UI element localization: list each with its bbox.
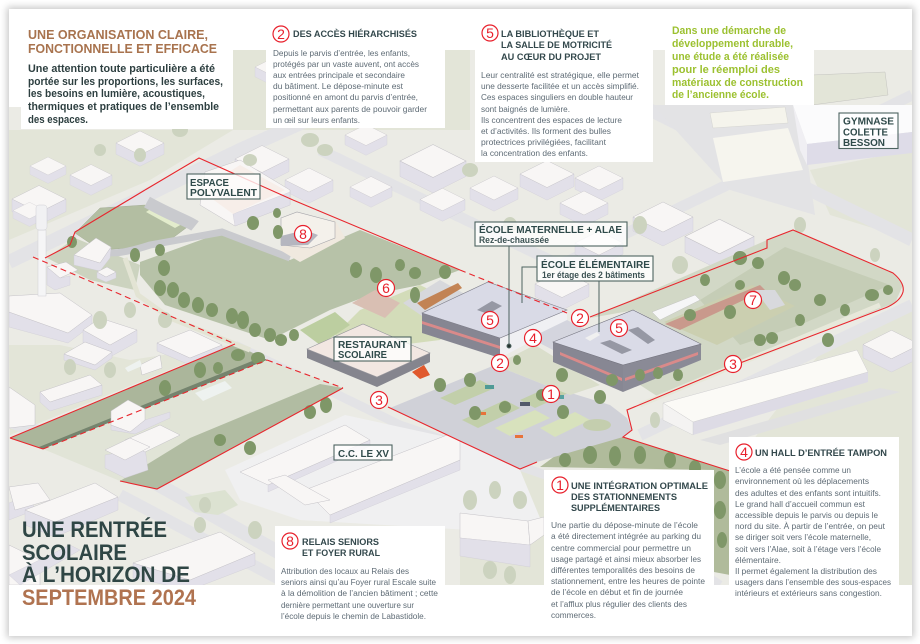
marker 8	[294, 226, 312, 242]
number badge 5	[482, 25, 498, 41]
marker 6: 6	[382, 280, 390, 296]
marker 1	[542, 386, 560, 402]
marker 3 west: 3	[375, 392, 383, 408]
body 5: une desserte facilitée et un accès simplifié.	[481, 81, 639, 91]
body 5: sont baignés de lumière.	[481, 104, 570, 114]
heading: organisation	[28, 28, 217, 56]
title: SCOLAIRE	[22, 540, 127, 565]
big shed south-east	[460, 350, 900, 575]
marker 7	[744, 292, 762, 308]
body 4	[735, 465, 891, 598]
label: école élémentaire: 1er étage des 2 bâtiments	[542, 270, 645, 280]
body 1: de l’école en début et fin de journée	[551, 587, 683, 597]
body 8: à la démolition de l’ancien bâtiment ; cette	[281, 588, 438, 598]
text: organisation intro: portée sur les proportions, les surfaces,	[28, 76, 223, 88]
body 1: a été directement intégrée au parking du	[551, 531, 701, 541]
lower-left buildings	[9, 483, 255, 590]
heading 5: LA BIBLIOTHÈQUE ET	[501, 28, 599, 39]
white panel: left edge	[9, 50, 21, 107]
panel: développement durable: Dans une démarche de	[672, 25, 786, 37]
number badge 4	[736, 444, 752, 460]
body 4: L’école a été pensée comme un	[735, 465, 851, 475]
panel: développement durable	[665, 25, 814, 105]
label: école élémentaire: ÉCOLE ÉLÉMENTAIRE	[541, 258, 650, 271]
number badge 1: 1	[556, 477, 564, 493]
body 4: environnement où les déplacements	[735, 476, 869, 486]
white panel: organisation	[21, 28, 233, 129]
school building left	[422, 282, 590, 358]
label: gymnase: COLETTE	[843, 128, 888, 138]
label: école maternelle: ÉCOLE MATERNELLE + ALAE	[479, 223, 622, 236]
body 2: un œil sur leurs enfants.	[273, 115, 360, 125]
marker 4	[524, 330, 542, 346]
title	[22, 517, 197, 610]
body 1	[551, 520, 705, 620]
trees	[67, 208, 893, 548]
body 8: seniors ainsi qu’au Foyer rural Escale suite	[281, 577, 436, 587]
marker 1: 1	[547, 386, 555, 402]
panel: développement durable: pour le réemploi des	[672, 64, 780, 76]
heading 1	[571, 480, 708, 513]
marker 2 south: 2	[496, 355, 504, 371]
title: SEPTEMBRE 2024	[22, 585, 197, 610]
body 4: intérieurs et extérieurs sans congestion.	[735, 588, 882, 598]
panel 1: stationnements	[544, 470, 714, 620]
espace polyvalent building	[200, 160, 290, 226]
number badge 1	[552, 477, 568, 493]
marker 6	[378, 280, 394, 296]
body 1: stationnement, entre les heures de pointe	[551, 576, 705, 586]
body 8: l’école depuis le chemin de Labastidole.	[281, 611, 426, 621]
marker 3 east: 3	[729, 356, 737, 372]
main school parking	[390, 345, 632, 469]
restaurant scolaire	[307, 324, 430, 387]
panel 8: relais seniors	[275, 526, 445, 621]
label: espace polyvalent: POLYVALENT	[190, 188, 258, 199]
heading 8: ET FOYER RURAL	[302, 547, 380, 558]
heading 5	[501, 28, 612, 62]
panel 2: accès hiérarchisés	[266, 26, 445, 128]
heading 1: SUPPLÉMENTAIRES	[571, 502, 660, 513]
body 1: et l’afflux plus régulier des clients des	[551, 599, 687, 609]
label: C.C. Le XV: C.C. LE XV	[338, 449, 389, 460]
label: restaurant scolaire	[334, 337, 411, 361]
body 2	[273, 48, 427, 125]
body 4: nord du site. À partir de l’entrée, on peut	[735, 521, 886, 531]
roads	[10, 128, 912, 479]
panel 4: hall d'entrée	[729, 437, 899, 598]
body 2: du bâtiment. Le dépose-minute est	[273, 81, 404, 91]
marker 3 east	[724, 356, 742, 372]
body 8: Attribution des locaux au Relais des	[281, 566, 409, 576]
panel: développement durable: une étude a été réalisée	[672, 51, 789, 63]
text: organisation intro: Une attention toute particulière a été	[28, 63, 215, 75]
marker 5 east	[610, 320, 628, 336]
body 5: la concentration des enfants.	[481, 148, 588, 158]
body 1: usage partagé et ainsi mieux absorber les	[551, 554, 701, 564]
body 5	[481, 70, 640, 158]
marker 2 north: 2	[576, 310, 584, 326]
north site meadow	[47, 202, 470, 350]
body 4: soit vers l’Alae, soit à l’étage vers l’école	[735, 544, 881, 554]
heading 1: DES STATIONNEMENTS	[571, 491, 677, 502]
marker 5 west: 5	[486, 312, 494, 328]
label: C.C. Le XV	[334, 445, 392, 460]
marker 5 west	[482, 312, 498, 328]
body 4: usagers dans l’ensemble des sous-espaces	[735, 577, 891, 587]
heading 8: RELAIS SENIORS	[302, 536, 379, 547]
marker 3 west	[370, 392, 388, 408]
number badge 4: 4	[740, 444, 748, 460]
label: gymnase: BESSON	[843, 138, 885, 149]
label: gymnase	[839, 113, 898, 149]
heading 5: LA SALLE DE MOTRICITÉ	[501, 39, 612, 50]
marker 5 east: 5	[615, 320, 623, 336]
label: restaurant scolaire: SCOLAIRE	[338, 350, 387, 361]
number badge 5: 5	[486, 25, 494, 41]
north school garden and schoolyard	[590, 230, 903, 405]
text: organisation intro: les besoins en lumière, acoustiques,	[28, 88, 205, 100]
body 2: aux entrées principale et secondaire	[273, 70, 405, 80]
label: gymnase: GYMNASE	[843, 116, 894, 128]
body 4: des adultes et des enfants sont intuitifs.	[735, 488, 881, 498]
green strip and gardens south-west	[10, 344, 343, 489]
number badge 8	[282, 533, 298, 549]
text: organisation intro	[28, 63, 223, 126]
body 1: commerces.	[551, 610, 596, 620]
body 4: élémentaire.	[735, 555, 781, 565]
body 2: permettant aux parents de pouvoir garder	[273, 104, 427, 114]
body 4: se diriger soit vers l’école maternelle,	[735, 532, 871, 542]
white cube buildings	[47, 238, 116, 290]
marker 2 north	[572, 310, 588, 326]
centre commercial C.C. Le XV	[225, 415, 545, 530]
body 5: et d’activités. Ils forment des bulles	[481, 126, 611, 136]
school building right	[553, 310, 701, 392]
panel 5: bibliothèque	[475, 25, 653, 162]
label: école maternelle	[475, 222, 627, 246]
heading 4: UN HALL D’ENTRÉE TAMPON	[755, 447, 887, 458]
number badge 8: 8	[286, 533, 294, 549]
title: UNE RENTRÉE	[22, 517, 167, 542]
body 1: centre commercial pour permettre un	[551, 543, 691, 553]
body 4: Il permet également la distribution des	[735, 566, 877, 576]
body 8	[281, 566, 438, 621]
panel: développement durable: matériaux de construction	[672, 77, 803, 89]
body 1: différentes temporalités des besoins de	[551, 565, 695, 575]
heading 8	[302, 536, 380, 558]
label: espace polyvalent: ESPACE	[190, 178, 229, 189]
heading: organisation: UNE ORGANISATION CLAIRE,	[28, 28, 208, 42]
label: restaurant scolaire: RESTAURANT	[338, 340, 408, 351]
relais seniors building	[281, 212, 335, 248]
body 2: positionné en amont du parvis d’entrée,	[273, 92, 418, 102]
panel: développement durable: développement durable,	[672, 38, 793, 50]
panel: développement durable: de l’ancienne école.	[672, 89, 769, 101]
heading 1: UNE INTÉGRATION OPTIMALE	[571, 480, 708, 491]
body 4: Le grand hall d’accueil commun est	[735, 499, 866, 509]
body 1: Une partie du dépose-minute de l’école	[551, 520, 698, 530]
body 8: dernière permettant une ouverture sur	[281, 600, 414, 610]
site boundary lines	[10, 158, 903, 489]
water tower	[36, 205, 47, 296]
pale background trees	[64, 123, 880, 584]
body 4: accessible depuis le parvis ou depuis le	[735, 510, 878, 520]
marker 8: 8	[299, 226, 307, 242]
text: organisation intro: des espaces.	[28, 114, 88, 126]
heading 5: AU CŒUR DU PROJET	[501, 51, 601, 62]
industrial buildings, left	[9, 293, 222, 428]
number badge 2: 2	[277, 26, 285, 42]
marker 7: 7	[749, 292, 757, 308]
marker 2 south	[492, 354, 508, 372]
title: À L’HORIZON DE	[22, 562, 190, 587]
heading: organisation: FONCTIONNELLE ET EFFICACE	[28, 42, 217, 56]
gymnase area	[710, 72, 912, 182]
body 2: protégés par un vaste auvent, ont accès	[273, 59, 419, 69]
marker 4: 4	[529, 330, 537, 346]
body 5: Ils concentrent des espaces de lecture	[481, 115, 622, 125]
label: école maternelle: Rez-de-chaussée	[479, 235, 549, 245]
label: espace polyvalent	[187, 174, 260, 199]
text: organisation intro: thermiques et pratiques de l’ensemble	[28, 101, 219, 113]
label: école élémentaire	[537, 256, 653, 281]
body 5: Leur centralité est stratégique, elle permet	[481, 70, 640, 80]
number badge 2	[273, 26, 289, 42]
heading 2: DES ACCÈS HIÉRARCHISÉS	[293, 28, 417, 39]
surrounding houses	[12, 56, 920, 372]
body 2: Depuis le parvis d’entrée, les enfants,	[273, 48, 410, 58]
map number markers	[294, 226, 762, 408]
body 5: protectrices privilégiées, facilitant	[481, 137, 607, 147]
body 5: Ces espaces singuliers en double hauteur	[481, 92, 633, 102]
leader lines	[507, 246, 599, 348]
